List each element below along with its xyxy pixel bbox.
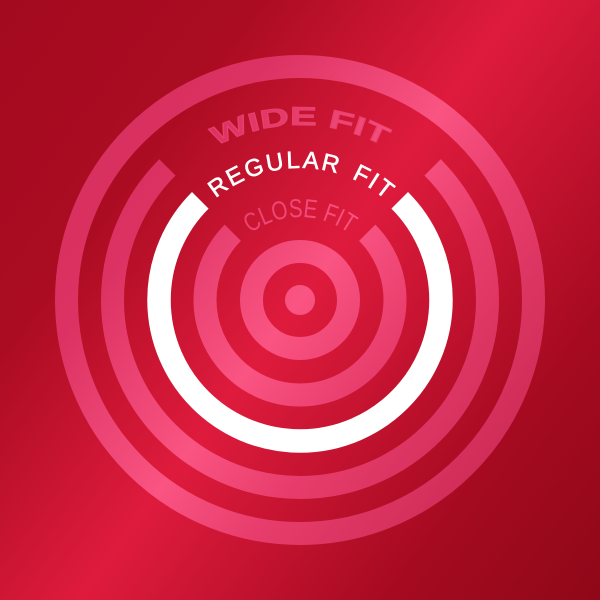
outer ring xyxy=(66,66,534,534)
label: close fit: CLOSE FIT xyxy=(244,199,359,230)
label: wide fit: WIDE FIT xyxy=(208,106,392,144)
inner ring xyxy=(252,252,348,348)
regular fit white open ring xyxy=(159,200,441,441)
wide fit open ring xyxy=(112,167,487,487)
label: regular fit: REGULAR FIT xyxy=(207,151,396,198)
close fit open ring xyxy=(205,233,395,395)
center dot xyxy=(285,285,315,315)
